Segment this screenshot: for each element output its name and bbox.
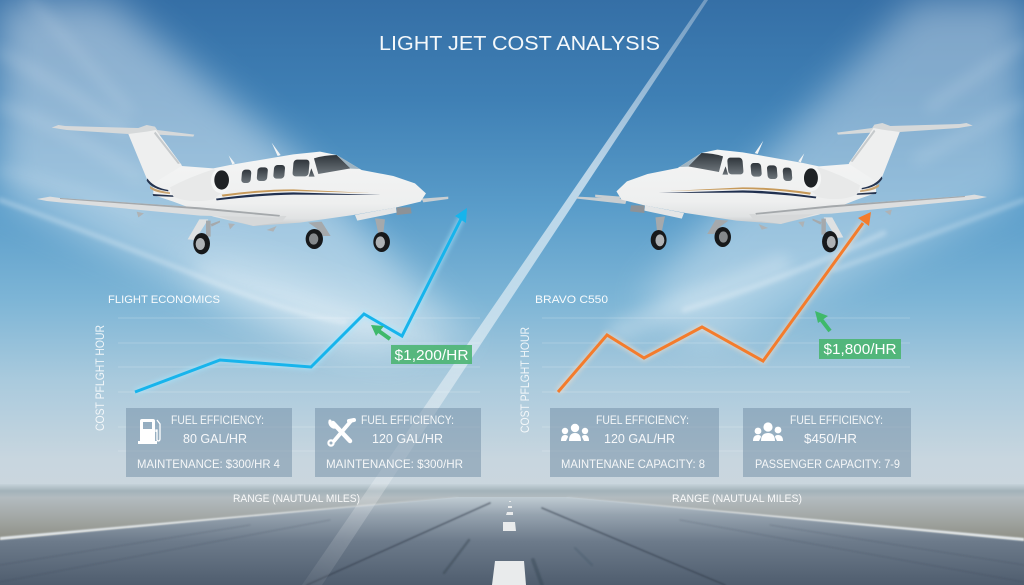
chart heading: flight economics: FLIGHT ECONOMICS	[108, 294, 220, 306]
stat panel: passengers: PASSENGER CAPACITY: 7-9	[755, 457, 900, 471]
stat panel: capacity: FUEL EFFICIENCY:	[596, 413, 689, 427]
cost badge: $1,800/HR	[824, 341, 897, 358]
runway	[0, 497, 1024, 585]
background: wispy clouds, left	[0, 0, 470, 370]
y axis label: COST PFLGHT HOUR	[520, 327, 532, 433]
stat panel: maintenance: 120 GAL/HR	[372, 432, 443, 446]
background: grass right	[555, 497, 1024, 541]
stat panel: fuel: FUEL EFFICIENCY:	[171, 413, 264, 427]
green pointer arrow	[815, 311, 830, 331]
icon: people	[561, 424, 589, 441]
orange cost line with arrow	[558, 212, 871, 392]
right chart	[520, 212, 911, 505]
stat panel: fuel: MAINTENANCE: $300/HR 4	[137, 457, 280, 471]
stat panel: capacity: 120 GAL/HR	[604, 432, 675, 446]
left chart	[95, 208, 481, 505]
runway edge lines	[0, 497, 459, 540]
title: LIGHT JET COST ANALYSIS	[379, 33, 660, 55]
background: grass left	[0, 497, 470, 541]
stat panel: maintenance: MAINTENANCE: $300/HR	[326, 457, 463, 471]
y axis label: COST PFLGHT HOUR	[95, 325, 107, 431]
diagonal divider	[302, 0, 708, 585]
icon: fuel pump	[138, 419, 160, 444]
stat panel: passengers: FUEL EFFICIENCY:	[790, 413, 883, 427]
x axis label: RANGE (NAUTUAL MILES)	[672, 493, 802, 505]
green pointer arrow	[371, 325, 390, 339]
stat panel: fuel	[126, 408, 292, 477]
stat panel: passengers: $450/HR	[804, 432, 857, 446]
stat panel: capacity: MAINTENANE CAPACITY: 8	[561, 457, 705, 471]
jet, left	[37, 125, 448, 254]
stat panel: maintenance	[315, 408, 481, 477]
cost badge: $1,200/HR	[394, 347, 469, 364]
runway centre dashes	[492, 501, 526, 585]
background: distant tree line	[0, 484, 1024, 498]
icon: people	[753, 422, 783, 441]
stat panel: maintenance: FUEL EFFICIENCY:	[361, 413, 454, 427]
stat panel: capacity	[550, 408, 719, 477]
chart heading: bravo c550: BRAVO C550	[535, 294, 608, 306]
jet, right	[577, 123, 987, 252]
blue cost line with arrow	[135, 208, 467, 392]
stat panel: passengers	[743, 408, 911, 477]
stat panel: fuel: 80 GAL/HR	[183, 432, 247, 446]
background: wispy clouds, right	[620, 0, 1024, 345]
x axis label: RANGE (NAUTUAL MILES)	[233, 493, 360, 505]
icon: wrench and screwdriver	[328, 420, 354, 446]
